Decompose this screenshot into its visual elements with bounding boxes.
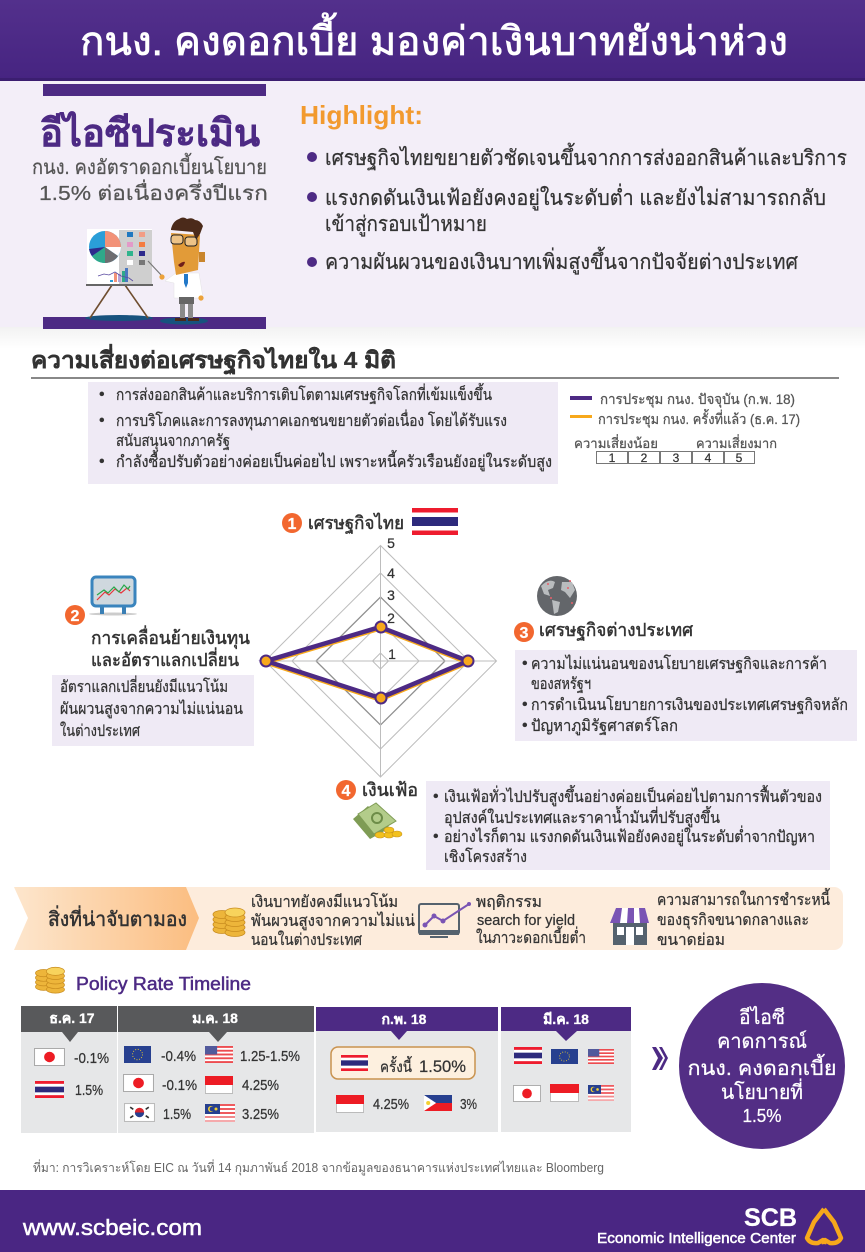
icon: banknotes and coins	[353, 803, 402, 839]
callout: EIC forecast circle	[679, 983, 845, 1149]
legend: การประชุม กนง. ปัจจุบัน (ก.พ. 18)	[600, 391, 795, 408]
watch item: baht	[251, 892, 415, 949]
panel: February 2018	[316, 1007, 498, 1132]
SCB wordmark: SCB	[744, 1204, 797, 1232]
panel: global economy notes: ปัญหาภูมิรัฐศาสตร์โลก	[531, 716, 678, 736]
panel: Thai economy notes: •	[99, 412, 105, 429]
callout: this meeting rate: ครั้งนี้	[380, 1056, 412, 1076]
panel: January 2018	[118, 1006, 314, 1133]
panel: March 2018	[501, 1007, 631, 1132]
previous meeting line	[266, 629, 468, 700]
dimension 1: Thai economy	[282, 508, 458, 535]
panel: EIC assessment	[32, 84, 268, 329]
radar chart	[260, 535, 496, 777]
panel: Thai economy notes: การบริโภคและการลงทุนภาคเอกชนขยายตัวต่อเนื่อง โดยได้รับแรง	[116, 409, 507, 431]
panel: February 2018: 4.25%	[373, 1096, 409, 1113]
watch item: SME debt	[657, 888, 830, 949]
watch item: SME debt: ขนาดย่อม	[657, 932, 725, 949]
watch item: search for yield: search for yield	[477, 912, 575, 929]
dimension 2: capital flows and exchange rate	[65, 577, 250, 670]
dimension 3: global economy: 3	[520, 625, 529, 642]
dimension 1: Thai economy: 1	[288, 516, 297, 533]
timeline heading	[36, 967, 251, 994]
panel: January 2018: 3.25%	[242, 1106, 279, 1123]
assessment subheading: 1.5% ต่อเนื่องครึ่งปีแรก	[39, 179, 268, 205]
source note: ที่มา: การวิเคราะห์โดย EIC ณ วันที่ 14 กุมภาพันธ์ 2018 จากข้อมูลของธนาคารแห่งประเทศไทยและ Bloomberg	[33, 1159, 604, 1176]
radar chart: 2	[387, 610, 395, 626]
panel: January 2018: 1.25-1.5%	[240, 1048, 300, 1065]
website: www.scbeic.com	[22, 1215, 202, 1240]
panel: December 2017: ธ.ค. 17	[49, 1010, 95, 1026]
panel: December 2017: -0.1%	[74, 1050, 109, 1067]
panel: inflation notes: อุปสงค์ในประเทศและราคาน้ำมันที่ปรับสูงขึ้น	[444, 806, 720, 828]
assessment subheading: กนง. คงอัตราดอกเบี้ยนโยบาย	[32, 153, 267, 179]
icon: storefront	[610, 908, 649, 945]
icon: coin stack	[213, 908, 245, 936]
panel: inflation notes	[426, 781, 830, 870]
highlight heading: Highlight:	[300, 100, 423, 130]
watch item: SME debt: ของธุรกิจขนาดกลางและ	[657, 912, 809, 930]
header banner	[0, 0, 865, 81]
panel: global economy notes: •	[522, 717, 528, 734]
callout: EIC forecast circle: 1.5%	[742, 1106, 782, 1126]
footer	[0, 1190, 865, 1252]
dimension 2: capital flows and exchange rate: การเคลื่อนย้ายเงินทุน	[91, 625, 250, 649]
legend: 5	[736, 451, 743, 465]
panel: global economy notes: ของสหรัฐฯ	[531, 676, 591, 693]
callout: this meeting rate: 1.50%	[419, 1057, 466, 1076]
callout: EIC forecast circle: อีไอซี	[739, 1006, 785, 1029]
legend: ความเสี่ยงน้อย	[574, 434, 658, 451]
dimension 2: capital flows and exchange rate: 2	[71, 608, 80, 625]
panel: Thai economy notes: สนับสนุนจากภาครัฐ	[116, 433, 230, 451]
panel: Thai economy notes: กำลังซื้อปรับตัวอย่างค่อยเป็นค่อยไป เพราะหนี้ครัวเรือนยังอยู่ในระดับสูง	[116, 450, 552, 472]
panel: Thai economy notes: •	[99, 453, 105, 470]
panel: February 2018: 3%	[460, 1096, 477, 1113]
section heading: risks: ความเสี่ยงต่อเศรษฐกิจไทยใน 4 มิติ	[31, 343, 396, 375]
timeline heading: Policy Rate Timeline	[76, 974, 251, 994]
panel: inflation notes: •	[433, 788, 439, 805]
legend: การประชุม กนง. ครั้งที่แล้ว (ธ.ค. 17)	[598, 409, 800, 428]
watch item: baht: นอนในต่างประเทศ	[251, 930, 362, 949]
legend: ความเสี่ยงมาก	[696, 434, 777, 451]
dimension 1: Thai economy: เศรษฐกิจไทย	[308, 512, 404, 534]
assessment subheading	[32, 153, 268, 205]
panel: highlight section	[0, 81, 865, 349]
callout: EIC forecast circle: นโยบายที่	[721, 1078, 803, 1104]
arrow: chevrons to forecast	[652, 1047, 668, 1070]
watch item: SME debt: ความสามารถในการชำระหนี้	[657, 888, 830, 909]
icon: presenter with chart board	[85, 218, 208, 324]
panel: January 2018: -0.1%	[162, 1077, 197, 1094]
dimension 3: global economy	[514, 576, 694, 642]
watch item: search for yield	[476, 894, 586, 947]
legend: 4	[705, 451, 712, 465]
legend: 2	[641, 451, 648, 465]
dimension 4: inflation: เงินเฟ้อ	[362, 780, 418, 800]
dimension 2: capital flows and exchange rate: และอัตราแลกเปลี่ยน	[91, 647, 239, 670]
watch item: baht: พันผวนสูงจากความไม่แน่	[251, 911, 415, 931]
panel: Thai economy notes: •	[99, 386, 105, 403]
icon: SCB logo	[807, 1209, 841, 1244]
panel: exchange rate note: ในต่างประเทศ	[60, 721, 140, 740]
panel: exchange rate note: อัตราแลกเปลี่ยนยังมีแนวโน้ม	[60, 675, 228, 696]
watch item: search for yield: พฤติกรรม	[476, 894, 542, 911]
panel: March 2018: มี.ค. 18	[543, 1011, 589, 1027]
panel: global economy notes: •	[522, 696, 528, 713]
panel: inflation notes: อย่างไรก็ตาม แรงกดดันเงินเฟ้อยังคงอยู่ในระดับต่ำจากปัญหา	[444, 825, 815, 847]
panel: Thai economy notes: การส่งออกสินค้าและบริการเติบโตตามเศรษฐกิจโลกที่เข้มแข็งขึ้น	[116, 383, 492, 404]
icon: coins	[36, 967, 64, 993]
assessment heading: อีไอซีประเมิน	[40, 111, 260, 155]
panel: exchange rate note	[52, 675, 254, 746]
panel: January 2018: 1.5%	[163, 1106, 191, 1123]
legend: 1	[609, 451, 616, 465]
highlight list: แรงกดดันเงินเฟ้อยังคงอยู่ในระดับต่ำ และยังไม่สามารถกลับ	[325, 183, 826, 211]
title: กนง. คงดอกเบี้ย มองค่าเงินบาทยังน่าห่วง	[80, 12, 788, 64]
callout: EIC forecast circle: คาดการณ์	[717, 1030, 807, 1053]
legend	[570, 391, 800, 465]
arrow label	[14, 887, 199, 950]
highlight list	[307, 143, 847, 275]
icon: Thai flag	[412, 508, 458, 535]
dimension 4: inflation: 4	[342, 783, 351, 800]
panel: January 2018: -0.4%	[161, 1048, 196, 1065]
callout: EIC forecast circle: กนง. คงดอกเบี้ย	[688, 1054, 836, 1080]
dimension 4: inflation	[336, 780, 418, 839]
panel: February 2018: ก.พ. 18	[382, 1011, 427, 1027]
panel: global economy notes	[515, 650, 857, 741]
panel: things to watch	[14, 887, 843, 950]
panel: January 2018: ม.ค. 18	[192, 1010, 238, 1026]
panel: December 2017: 1.5%	[75, 1082, 103, 1099]
panel: global economy notes: •	[522, 655, 528, 672]
SCB wordmark: Economic Intelligence Center	[597, 1231, 796, 1247]
panel: inflation notes: เงินเฟ้อทั่วไปปรับสูงขึ้นอย่างค่อยเป็นค่อยไปตามการฟื้นตัวของ	[444, 785, 822, 807]
dimension 3: global economy: เศรษฐกิจต่างประเทศ	[539, 620, 694, 641]
watch item: baht: เงินบาทยังคงมีแนวโน้ม	[251, 892, 398, 911]
panel: January 2018: 4.25%	[242, 1077, 279, 1094]
panel: inflation notes: •	[433, 828, 439, 845]
radar chart: 5	[387, 535, 395, 551]
icon: globe	[537, 576, 577, 616]
radar chart: 4	[387, 565, 395, 581]
watch item: search for yield: ในภาวะดอกเบี้ยต่ำ	[476, 926, 586, 947]
highlight list: เข้าสู่กรอบเป้าหมาย	[325, 213, 487, 237]
current meeting line	[266, 627, 468, 698]
radar chart: 3	[387, 587, 395, 603]
highlight list: ความผันผวนของเงินบาทเพิ่มสูงขึ้นจากปัจจัยต่างประเทศ	[325, 247, 799, 275]
icon: monitor with rising line	[419, 902, 471, 938]
panel: global economy notes: ความไม่แน่นอนของนโยบายเศรษฐกิจและการค้า	[531, 654, 827, 673]
legend: 3	[673, 451, 680, 465]
panel: Thai economy notes	[88, 382, 558, 484]
radar chart: 1	[388, 646, 396, 662]
arrow label: สิ่งที่น่าจับตามอง	[48, 905, 187, 931]
panel: exchange rate note: ผันผวนสูงจากความไม่แน่นอน	[60, 699, 243, 719]
panel: December 2017	[21, 1006, 117, 1133]
SCB wordmark	[597, 1204, 797, 1247]
callout: this meeting rate	[331, 1047, 475, 1079]
icon: monitor with line chart	[89, 577, 137, 616]
panel: inflation notes: เชิงโครงสร้าง	[444, 847, 527, 866]
